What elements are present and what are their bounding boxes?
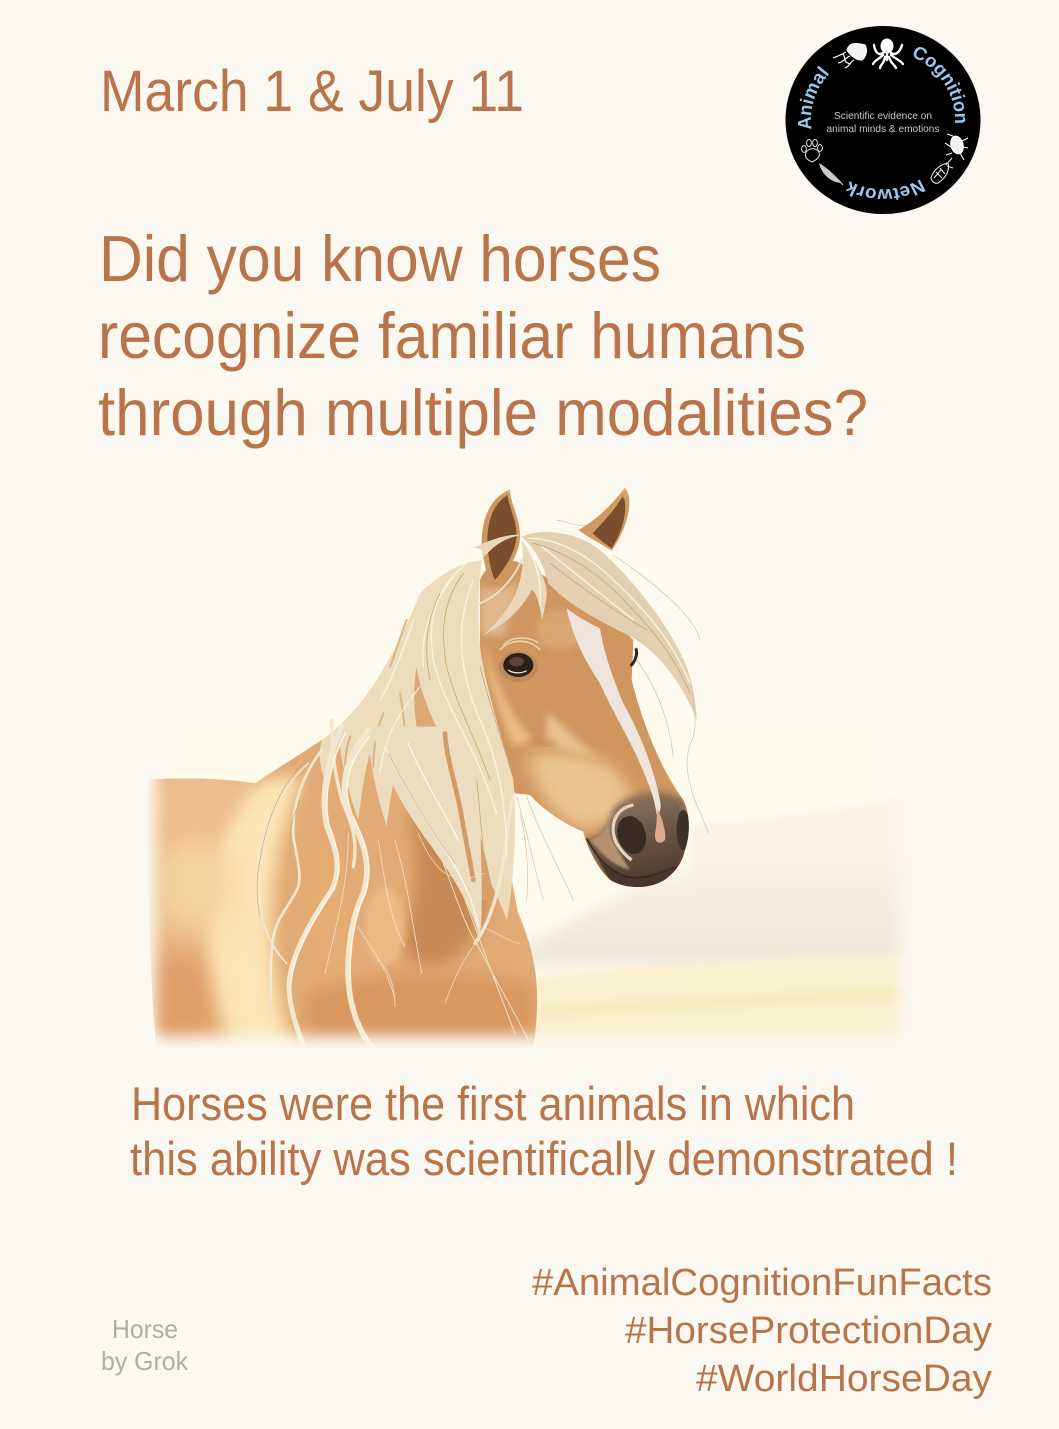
yellow field bbox=[534, 956, 906, 1040]
mouth bbox=[587, 838, 677, 878]
title: did you know: through multiple modalities? bbox=[98, 376, 868, 449]
logo: Animal Cognition Network badge bbox=[786, 26, 980, 214]
upper mane tuft bbox=[472, 535, 523, 560]
logo tagline: Scientific evidence on bbox=[834, 111, 932, 122]
title: did you know: Did you know horses bbox=[99, 222, 661, 295]
title: did you know: recognize familiar humans bbox=[98, 299, 806, 372]
left ear bbox=[482, 489, 520, 587]
hashtags: #WorldHorseDay bbox=[696, 1358, 992, 1400]
tan band in mane bbox=[414, 667, 436, 727]
cheek edge light bbox=[484, 650, 532, 748]
watercolor sky background bbox=[130, 460, 930, 1060]
tan wedge behind lower mane bbox=[449, 747, 495, 900]
forelock and upper mane strands bbox=[380, 520, 708, 900]
chin dark bbox=[597, 857, 677, 888]
horse body bbox=[148, 740, 538, 1046]
muzzle bbox=[585, 792, 690, 888]
light patch on chest bbox=[365, 887, 405, 967]
bright shoulder light bbox=[207, 776, 302, 1060]
logo tagline bbox=[826, 111, 940, 135]
chest shadow bbox=[402, 797, 489, 967]
hashtags bbox=[532, 1262, 992, 1400]
logo tagline: animal minds & emotions bbox=[826, 124, 940, 135]
far eye lashes bbox=[631, 648, 637, 666]
head shape bbox=[480, 560, 689, 887]
forelock bbox=[522, 532, 697, 720]
icon: feather bbox=[819, 163, 843, 185]
icon: octopus bbox=[873, 38, 903, 68]
icon: fish bbox=[931, 158, 953, 183]
icon: paw bbox=[802, 139, 822, 162]
nostril right bbox=[677, 810, 690, 850]
caption: first animals: Horses were the first animals in which bbox=[131, 1077, 855, 1130]
date heading: March 1 & July 11 bbox=[100, 59, 524, 124]
lower chest tone bbox=[301, 972, 537, 1038]
eye folds bbox=[500, 638, 540, 650]
mane mass on neck bbox=[320, 560, 515, 920]
image credit bbox=[101, 1314, 189, 1376]
nose pink mark bbox=[655, 808, 665, 843]
cheek highlight bbox=[527, 752, 630, 830]
eye bbox=[499, 651, 538, 682]
cream lock strands bbox=[259, 720, 513, 1050]
white highlights bbox=[291, 733, 478, 983]
flank base tone bbox=[156, 778, 252, 1028]
blaze bbox=[567, 608, 661, 815]
upper mane tan lines bbox=[427, 543, 690, 847]
tan lines in mane bbox=[345, 620, 407, 767]
title: did you know bbox=[98, 222, 868, 449]
thin crossing strands bbox=[325, 833, 528, 1040]
upper flank light bbox=[155, 837, 235, 930]
shoulder patch bbox=[252, 786, 253, 790]
distant pink hill bbox=[690, 795, 920, 880]
icon: jellyfish bbox=[833, 44, 866, 68]
upper mane highlights bbox=[380, 538, 690, 857]
illustration: palomino horse bbox=[148, 488, 907, 1047]
stray hairs bbox=[517, 520, 708, 900]
facial crest highlight bbox=[547, 713, 597, 757]
hashtags: #HorseProtectionDay bbox=[625, 1310, 992, 1352]
hashtags: #AnimalCognitionFunFacts bbox=[532, 1262, 992, 1304]
grey hair outlines bbox=[257, 753, 455, 917]
nostril left bbox=[617, 816, 646, 854]
forehead lock bbox=[483, 540, 547, 635]
image credit: Horse bbox=[112, 1314, 178, 1344]
mane strands on body bbox=[257, 720, 528, 1050]
image credit: by Grok bbox=[101, 1346, 189, 1376]
right ear bbox=[578, 487, 629, 551]
lower lip light bbox=[590, 824, 630, 871]
caption: first animals: this ability was scientifically demonstrated ! bbox=[130, 1132, 958, 1185]
caption: first animals bbox=[130, 1077, 958, 1185]
inner neck gap bbox=[445, 733, 473, 880]
distant grey hills bbox=[530, 878, 901, 968]
horse head and ears bbox=[473, 487, 700, 893]
forehead tone bbox=[536, 610, 578, 650]
icon: beetle bbox=[945, 134, 968, 160]
logo ring text bbox=[798, 47, 966, 200]
nostril rim bbox=[613, 805, 633, 860]
logo disc bbox=[786, 26, 980, 214]
logo ring text: Animal bbox=[798, 66, 829, 129]
upper neck patch bbox=[480, 580, 520, 637]
lower mane main lobe bbox=[372, 727, 482, 940]
ear base strand bbox=[480, 560, 522, 603]
logo ring text: Network bbox=[845, 180, 926, 200]
facial crest shadow bbox=[533, 738, 557, 744]
neck mid tone bbox=[303, 807, 359, 1040]
logo ring text: Cognition bbox=[914, 47, 966, 123]
flank shading bbox=[152, 943, 220, 1040]
